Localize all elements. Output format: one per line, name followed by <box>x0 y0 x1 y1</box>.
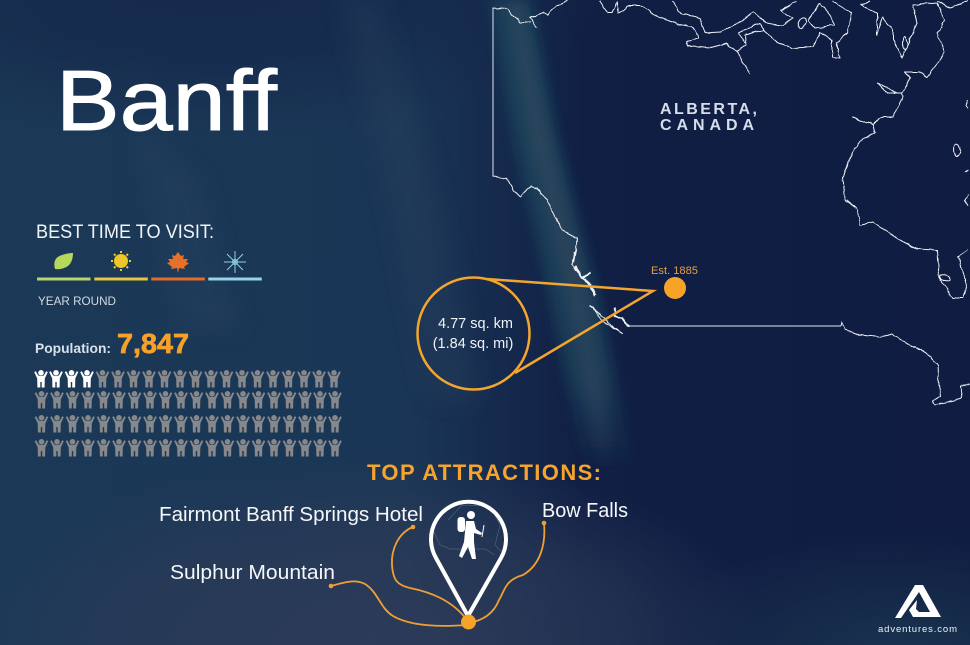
panel: top attractions <box>159 460 628 630</box>
callout: area <box>418 278 653 390</box>
number: population: 7,847 <box>117 328 189 359</box>
logo: adventures.com <box>878 585 957 635</box>
label: Alberta, Canada <box>660 101 757 134</box>
title: Banff <box>56 54 277 149</box>
label: Alberta, Canada: CANADA <box>660 117 754 134</box>
labels: attractions: Fairmont Banff Springs Hotel <box>159 504 423 526</box>
text: area: 4.77 sq. km <box>438 316 513 332</box>
connector end dots <box>329 521 546 588</box>
panel: population <box>34 328 342 456</box>
heading: best time to visit: BEST TIME TO VISIT: <box>36 221 214 243</box>
heading: top attractions: TOP ATTRACTIONS: <box>367 460 601 485</box>
panel: best time to visit <box>36 221 262 308</box>
icon: spring leaf <box>54 253 73 269</box>
text: year round: YEAR ROUND <box>38 296 116 308</box>
icon: winter snowflake <box>224 251 246 273</box>
map: North America coastline <box>493 0 970 405</box>
labels: attractions <box>159 500 628 584</box>
marker: Banff location: Est. 1885 <box>651 265 698 277</box>
label: Alberta, Canada: ALBERTA, <box>660 101 757 118</box>
labels: attractions: Sulphur Mountain <box>170 562 335 584</box>
labels: attractions: Bow Falls <box>542 500 628 522</box>
marker: Banff location <box>651 265 698 299</box>
connector lines <box>331 523 544 626</box>
icon: map pin with hiker <box>431 502 506 616</box>
icon: autumn maple leaf <box>167 252 189 273</box>
logo: adventures.com: adventures.com <box>878 624 957 635</box>
magnifier circle and pointer <box>418 278 653 390</box>
pin base dot <box>461 614 476 630</box>
label: population: Population: <box>35 340 111 356</box>
season bars <box>37 278 262 280</box>
text: area <box>433 316 513 352</box>
text: area: (1.84 sq. mi) <box>433 336 513 352</box>
icon: summer sun <box>111 251 131 271</box>
pictogram: people <box>34 370 342 456</box>
